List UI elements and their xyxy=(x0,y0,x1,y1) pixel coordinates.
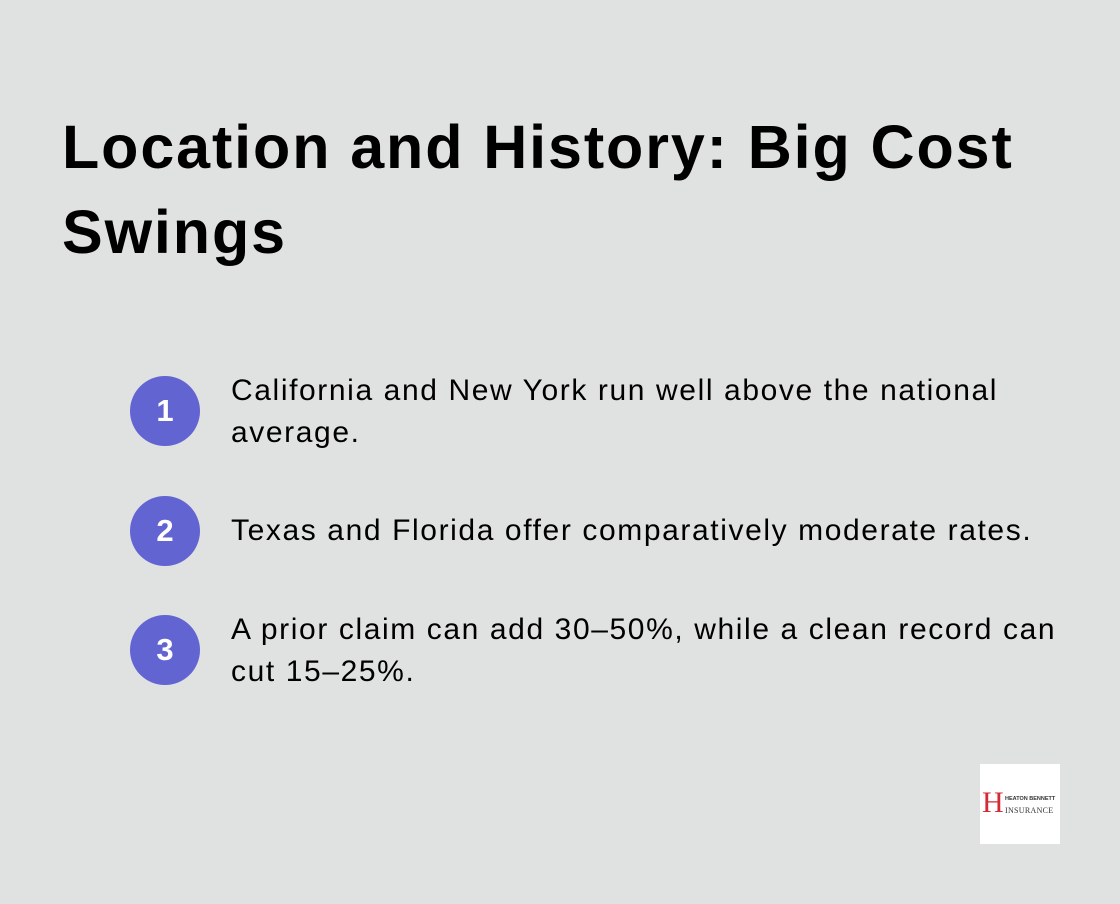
title xyxy=(62,113,1014,266)
text 1 xyxy=(231,374,998,449)
item 1 xyxy=(130,374,998,449)
text 3: A prior claim can add 30–50%, while a clean record can xyxy=(231,613,1056,646)
logo: H xyxy=(982,786,1004,819)
icon: number 3: 3 xyxy=(156,632,174,667)
item 2 xyxy=(130,496,1032,566)
logo xyxy=(980,764,1060,844)
item 3 xyxy=(130,613,1056,688)
logo: INSURANCE xyxy=(1005,806,1053,815)
title: Location and History: Big Cost xyxy=(62,113,1014,181)
logo: HEATON BENNETT xyxy=(1005,796,1055,802)
text 2: Texas and Florida offer comparatively moderate rates. xyxy=(231,514,1032,547)
icon: number 2: 2 xyxy=(156,513,174,548)
text 1: average. xyxy=(231,416,361,449)
title: Swings xyxy=(62,198,287,266)
icon: number 1 xyxy=(130,376,200,446)
text 1: California and New York run well above the national xyxy=(231,374,998,407)
text 3: cut 15–25%. xyxy=(231,655,415,688)
text 3 xyxy=(231,613,1056,688)
icon: number 1: 1 xyxy=(156,393,174,428)
icon: number 3 xyxy=(130,615,200,685)
icon: number 2 xyxy=(130,496,200,566)
